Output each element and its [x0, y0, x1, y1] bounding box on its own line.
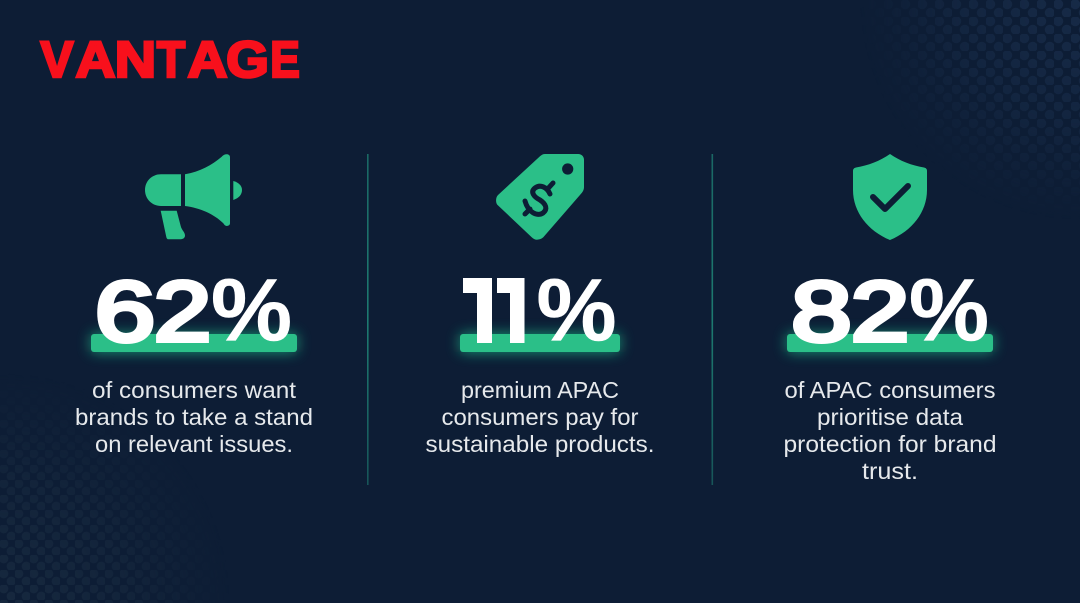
logo: VANTAGE: V — [40, 31, 74, 88]
logo: VANTAGE: E — [270, 31, 300, 88]
number: 1 — [491, 264, 539, 358]
description — [426, 377, 654, 457]
icon: megaphone — [145, 154, 242, 239]
number — [463, 278, 614, 343]
description: on relevant issues. — [95, 431, 293, 457]
number: % — [536, 260, 616, 360]
description — [784, 377, 996, 484]
highlight bar — [787, 334, 993, 352]
divider right — [712, 154, 713, 485]
description: brands to take a stand — [75, 404, 313, 430]
divider left — [367, 154, 369, 485]
logo: VANTAGE: N — [115, 31, 156, 88]
panel: consumers want brands to take a stand — [75, 154, 313, 457]
description: of consumers want — [92, 377, 297, 403]
highlight bar — [460, 334, 620, 352]
number: 1 — [459, 264, 507, 358]
panel: premium APAC consumers pay — [426, 154, 654, 457]
logo: VANTAGE: A — [76, 31, 116, 88]
panel: APAC consumers prioritise data protection — [784, 154, 996, 484]
highlight bar — [91, 334, 297, 352]
stat: 11% — [459, 260, 620, 360]
description: protection for brand — [784, 431, 996, 457]
number: 2 — [154, 264, 211, 358]
description — [75, 377, 313, 457]
number: % — [909, 260, 989, 360]
number: 8 — [792, 264, 852, 358]
logo: VANTAGE: A — [188, 31, 228, 88]
number: % — [211, 260, 292, 360]
logo: VANTAGE: T — [157, 31, 185, 88]
description: sustainable products. — [426, 431, 654, 457]
number: 6 — [95, 264, 155, 358]
logo: VANTAGE: G — [226, 31, 269, 88]
description: prioritise data — [817, 404, 963, 430]
stat: 62% — [91, 260, 297, 360]
description: trust. — [862, 458, 918, 484]
icon: price tag — [496, 154, 584, 240]
description: consumers pay for — [442, 404, 639, 430]
description: of APAC consumers — [784, 377, 996, 403]
description: premium APAC — [461, 377, 619, 403]
stat: 82% — [787, 260, 993, 360]
icon: shield with check — [853, 154, 927, 240]
number: 2 — [851, 264, 909, 358]
